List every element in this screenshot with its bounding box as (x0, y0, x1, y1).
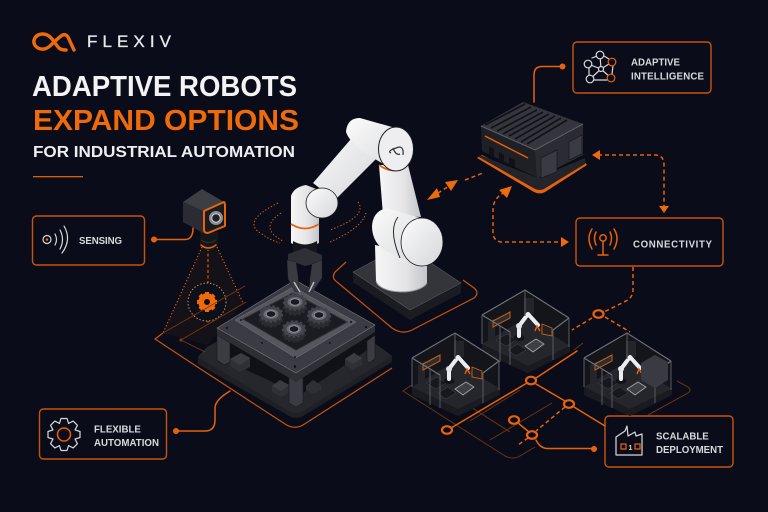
panel: sensing (32, 216, 144, 265)
logo (34, 32, 172, 51)
gears in tray (260, 294, 330, 342)
title underline (33, 176, 83, 177)
icon: sensing waves (43, 226, 68, 253)
label: scalable deployment: SCALABLE (656, 432, 709, 442)
table bolts (226, 319, 367, 368)
icon: neural network (584, 51, 616, 83)
icon: factory: 1 (628, 445, 632, 452)
tray (235, 287, 356, 362)
label: sensing: SENSING (79, 236, 122, 247)
subtitle: FOR INDUSTRIAL AUTOMATION (33, 144, 295, 161)
cell: right (584, 333, 672, 416)
robot cells (412, 290, 672, 416)
logo mark (34, 34, 74, 50)
label: scalable deployment: DEPLOYMENT (656, 445, 723, 456)
robot base outline (333, 262, 477, 332)
right cell machine (641, 355, 668, 388)
shoulder joint (372, 208, 426, 268)
panel: flexible automation (40, 409, 166, 459)
network nodes (442, 310, 604, 439)
robot signal arcs (254, 202, 366, 243)
robot arm (287, 118, 461, 320)
title (32, 71, 299, 161)
table modules (230, 353, 362, 397)
connector: automation to table (173, 391, 230, 434)
camera vision cone (163, 247, 246, 352)
label: adaptive intelligence: ADAPTIVE (631, 58, 681, 68)
forearm (313, 132, 377, 200)
automation table outline (155, 333, 392, 427)
network floor outlines (403, 343, 690, 458)
icon: gear outline (48, 418, 80, 450)
panel: connectivity (576, 218, 723, 266)
orange joint ring (379, 165, 408, 170)
camera (183, 189, 225, 250)
upper arm (379, 165, 421, 217)
table under shadow (217, 300, 375, 395)
icon: antenna (589, 229, 617, 255)
panel: scalable deployment (605, 416, 733, 467)
network lines (442, 267, 633, 452)
label: flexible automation: AUTOMATION (94, 438, 159, 449)
robot base plate (353, 245, 461, 320)
arrow: robot to controller (427, 173, 483, 200)
label: adaptive intelligence: INTELLIGENCE (631, 72, 705, 82)
arrow: controller to connectivity left (493, 186, 569, 247)
elbow logo (390, 147, 403, 155)
controller box (477, 102, 587, 194)
elbow joint (346, 118, 413, 171)
title line 2: EXPAND OPTIONS (33, 105, 299, 137)
table top (217, 280, 375, 382)
title line 1: ADAPTIVE ROBOTS (32, 71, 297, 103)
connector: intelligence to controller (534, 64, 566, 102)
connector: sensing to camera (151, 228, 193, 242)
table legs (217, 335, 375, 407)
gripper flange (293, 241, 317, 254)
robot pedestal (375, 245, 427, 292)
gripper (287, 248, 322, 292)
wrist housing (291, 185, 319, 247)
arrow: controller to connectivity right (592, 150, 669, 213)
table floor plate (198, 300, 392, 418)
label: connectivity: CONNECTIVITY (633, 240, 713, 250)
panel: adaptive intelligence (573, 42, 711, 93)
brand name: FLEXIV (87, 32, 172, 51)
cell: left (412, 333, 500, 416)
cell: centre (482, 290, 570, 373)
table (198, 280, 392, 418)
label: flexible automation: FLEXIBLE (94, 424, 141, 436)
wrist joint (306, 188, 338, 218)
icon: vision gear (197, 292, 217, 312)
